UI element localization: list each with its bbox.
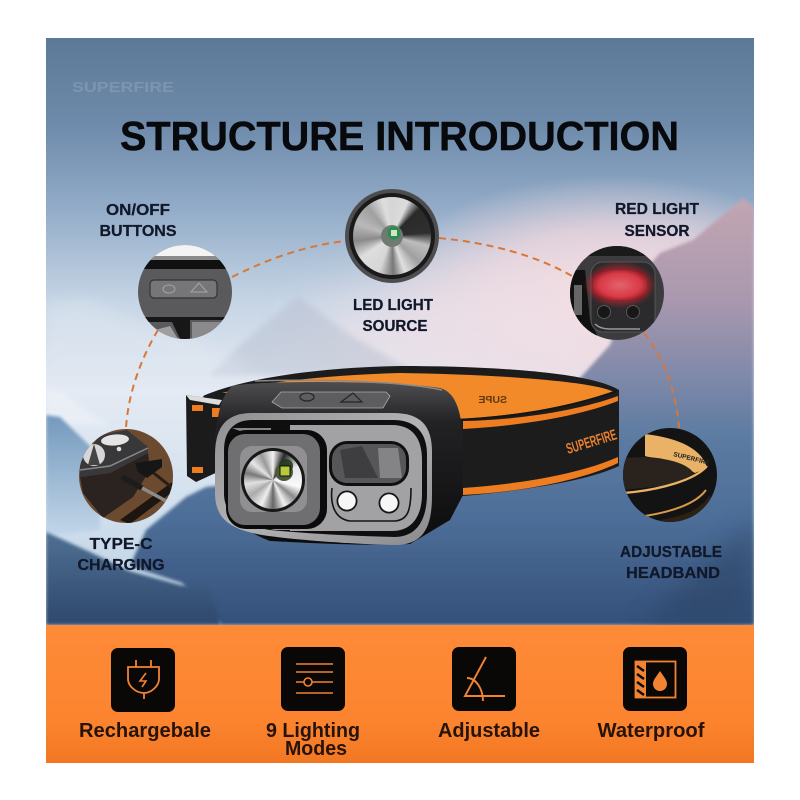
feature: lighting modes: Modes — [285, 738, 347, 760]
icon: sliders — [281, 647, 345, 711]
label: led light source: LED LIGHT — [353, 297, 433, 314]
feature: waterproof — [598, 647, 705, 742]
background: misty mountains — [46, 38, 800, 625]
icon: water drop on wall — [623, 647, 687, 711]
inset: adjustable headband — [623, 428, 717, 524]
label: adjustable headband: HEADBAND — [626, 565, 720, 582]
feature: lighting modes — [266, 647, 360, 760]
title: STRUCTURE INTRODUCTION — [120, 113, 679, 159]
label: red light sensor: SENSOR — [624, 223, 690, 240]
watermark: SUPERFIRE: SUPERFIRE — [72, 79, 174, 96]
strap clip — [186, 395, 222, 482]
feature: rechargeable — [79, 648, 211, 742]
feature: lighting modes: 9 Lighting — [266, 720, 360, 742]
label: adjustable headband: ADJUSTABLE — [620, 544, 722, 561]
icon: angle — [452, 647, 516, 711]
feature: adjustable: Adjustable — [438, 720, 540, 742]
label: type-c charging: CHARGING — [78, 557, 164, 574]
label: on/off buttons — [100, 202, 177, 240]
label: led light source — [353, 297, 433, 335]
feature: adjustable — [438, 647, 540, 742]
power and mode buttons — [272, 392, 390, 408]
dashed connector arcs — [126, 238, 679, 428]
inset: red light sensor — [570, 246, 664, 341]
feature: rechargeable: Rechargebale — [79, 720, 211, 742]
inset: type-c charging — [79, 428, 175, 524]
label: led light source: SOURCE — [362, 318, 428, 335]
silver bezel — [215, 413, 432, 545]
label: type-c charging: TYPE-C — [90, 536, 153, 553]
inset: LED light source — [345, 189, 439, 283]
label: adjustable headband — [620, 544, 722, 582]
lens housing — [226, 430, 327, 529]
white LEDs — [336, 490, 358, 512]
label: on/off buttons: BUTTONS — [100, 223, 177, 240]
feature: waterproof: Waterproof — [598, 720, 705, 742]
label: red light sensor: RED LIGHT — [615, 201, 699, 218]
headband strap — [203, 366, 619, 496]
band text: SUPERFIRE: SUPERFIRE — [564, 426, 619, 458]
label: red light sensor — [615, 201, 699, 240]
band text: mirrored: SUPE — [478, 394, 507, 406]
sensor window — [329, 441, 409, 486]
label: on/off buttons: ON/OFF — [106, 202, 170, 219]
icon: plug — [111, 648, 175, 712]
lens — [241, 448, 305, 512]
inset: on/off buttons — [138, 245, 232, 339]
label: type-c charging — [78, 536, 164, 574]
bottom orange band — [46, 625, 754, 763]
inset: adjustable headband: SUPERFIRE — [673, 451, 711, 467]
headlamp body — [215, 380, 463, 545]
